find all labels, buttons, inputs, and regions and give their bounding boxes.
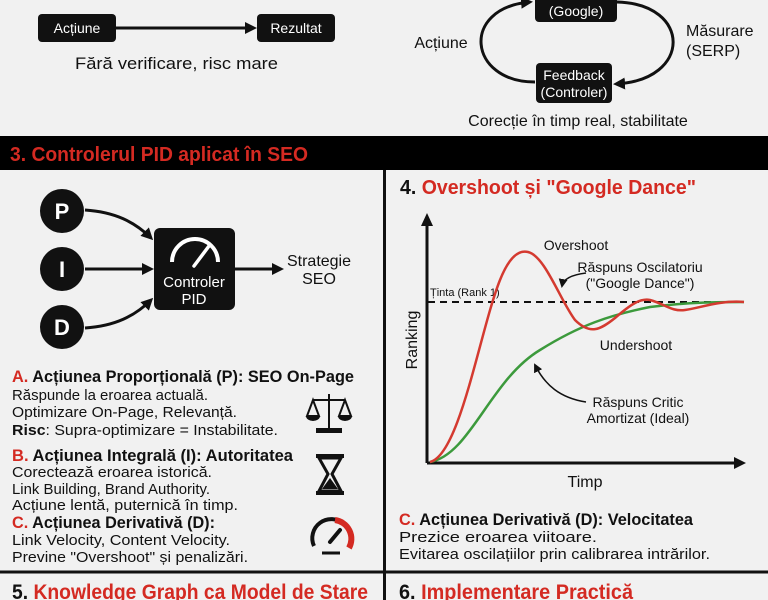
text block C right xyxy=(399,510,710,563)
box: feedback: (Controler) xyxy=(541,84,607,100)
text block B: Corectează eroarea istorică. xyxy=(12,464,212,481)
text block A: Risc: Supra-optimizare = Instabilitate. xyxy=(12,422,278,439)
box: controller PID: PID xyxy=(181,291,207,308)
label: strategie SEO: SEO xyxy=(302,271,336,288)
text block C left: Previne "Overshoot" și penalizări. xyxy=(12,549,248,566)
section header 3: 3. Controlerul PID aplicat în SEO xyxy=(10,144,308,166)
arrow: to strategy xyxy=(235,268,281,270)
circle I: I xyxy=(59,257,65,282)
closed loop diagram: (SERP) xyxy=(686,43,740,60)
text block C left: C. Acțiunea Derivativă (D): xyxy=(12,513,215,532)
text block B: B. Acțiunea Integrală (I): Autoritatea xyxy=(12,446,294,465)
section header 4: 4. Overshoot și "Google Dance" xyxy=(400,177,696,199)
text block A: Răspunde la eroarea actuală. xyxy=(12,387,208,404)
label: actiune: Acțiune xyxy=(414,35,468,52)
open loop diagram xyxy=(38,14,335,73)
circle P xyxy=(40,189,84,233)
text block A: A. Acțiunea Proporțională (P): SEO On-Page xyxy=(12,367,354,386)
icon: hourglass xyxy=(316,454,344,495)
box: actiune xyxy=(38,14,116,42)
chart: overshoot: Răspuns Critic xyxy=(592,394,684,410)
circle D xyxy=(40,305,84,349)
text block C right: Prezice eroarea viitoare. xyxy=(399,529,597,546)
text block C right: Evitarea oscilațiilor prin calibrarea intrărilor. xyxy=(399,546,710,563)
label: masurare: Măsurare xyxy=(686,23,754,40)
caption: open loop: Fără verificare, risc mare xyxy=(75,54,278,73)
divider lines xyxy=(383,170,386,600)
labels: Overshoot xyxy=(544,237,608,253)
icon: gauge xyxy=(172,239,218,262)
box: rezultat: Rezultat xyxy=(270,20,322,36)
chart: overshoot xyxy=(404,213,746,491)
chart: overshoot: Ținta (Rank 1) xyxy=(430,287,500,299)
axes xyxy=(427,222,740,463)
chart: overshoot: Amortizat (Ideal) xyxy=(587,410,689,426)
arrow: actiune to rezultat xyxy=(116,26,254,30)
text block C left xyxy=(12,513,248,566)
arrow: masurare loop xyxy=(616,2,673,84)
arrow: actiune loop xyxy=(481,2,535,82)
chart: overshoot: Timp xyxy=(568,474,603,491)
text block B xyxy=(12,446,294,514)
circle I xyxy=(40,247,84,291)
box: feedback xyxy=(536,63,612,103)
chart: overshoot: Ranking xyxy=(404,311,421,369)
caption: closed loop: Corecție în timp real, stabilitate xyxy=(468,113,688,130)
section header 3 xyxy=(0,136,768,170)
box: controller PID xyxy=(154,228,235,310)
arrows into controller xyxy=(85,210,151,328)
box: feedback: Feedback xyxy=(543,67,606,83)
text block B: Link Building, Brand Authority. xyxy=(12,481,210,498)
target line xyxy=(428,301,744,303)
chart: overshoot: Răspuns Oscilatoriu xyxy=(577,259,703,275)
curve: oscillatory red xyxy=(430,252,744,462)
label: strategie SEO: Strategie xyxy=(287,253,351,270)
circle P: P xyxy=(55,199,69,224)
box: rezultat xyxy=(257,14,335,42)
text block C right: C. Acțiunea Derivativă (D): Velocitatea xyxy=(399,510,694,529)
box: google: (Google) xyxy=(549,3,603,19)
text block A: Optimizare On-Page, Relevanță. xyxy=(12,404,237,421)
chart: overshoot: Undershoot xyxy=(600,337,672,353)
curve: critical damped green xyxy=(430,302,744,462)
text block A xyxy=(12,367,354,439)
panel: PID diagram xyxy=(40,189,351,349)
text block C left: Link Velocity, Content Velocity. xyxy=(12,532,230,549)
closed loop diagram xyxy=(414,0,754,130)
circle D: D xyxy=(54,315,70,340)
chart: overshoot: ("Google Dance") xyxy=(586,275,694,291)
icon: speedometer xyxy=(312,519,351,553)
box: google xyxy=(535,0,617,22)
label: strategie SEO xyxy=(287,253,351,288)
box: controller PID: Controler xyxy=(163,274,225,291)
text block B: Acțiune lentă, puternică în timp. xyxy=(12,497,238,514)
box: actiune: Acțiune xyxy=(54,20,101,36)
icon: scales xyxy=(307,394,351,432)
